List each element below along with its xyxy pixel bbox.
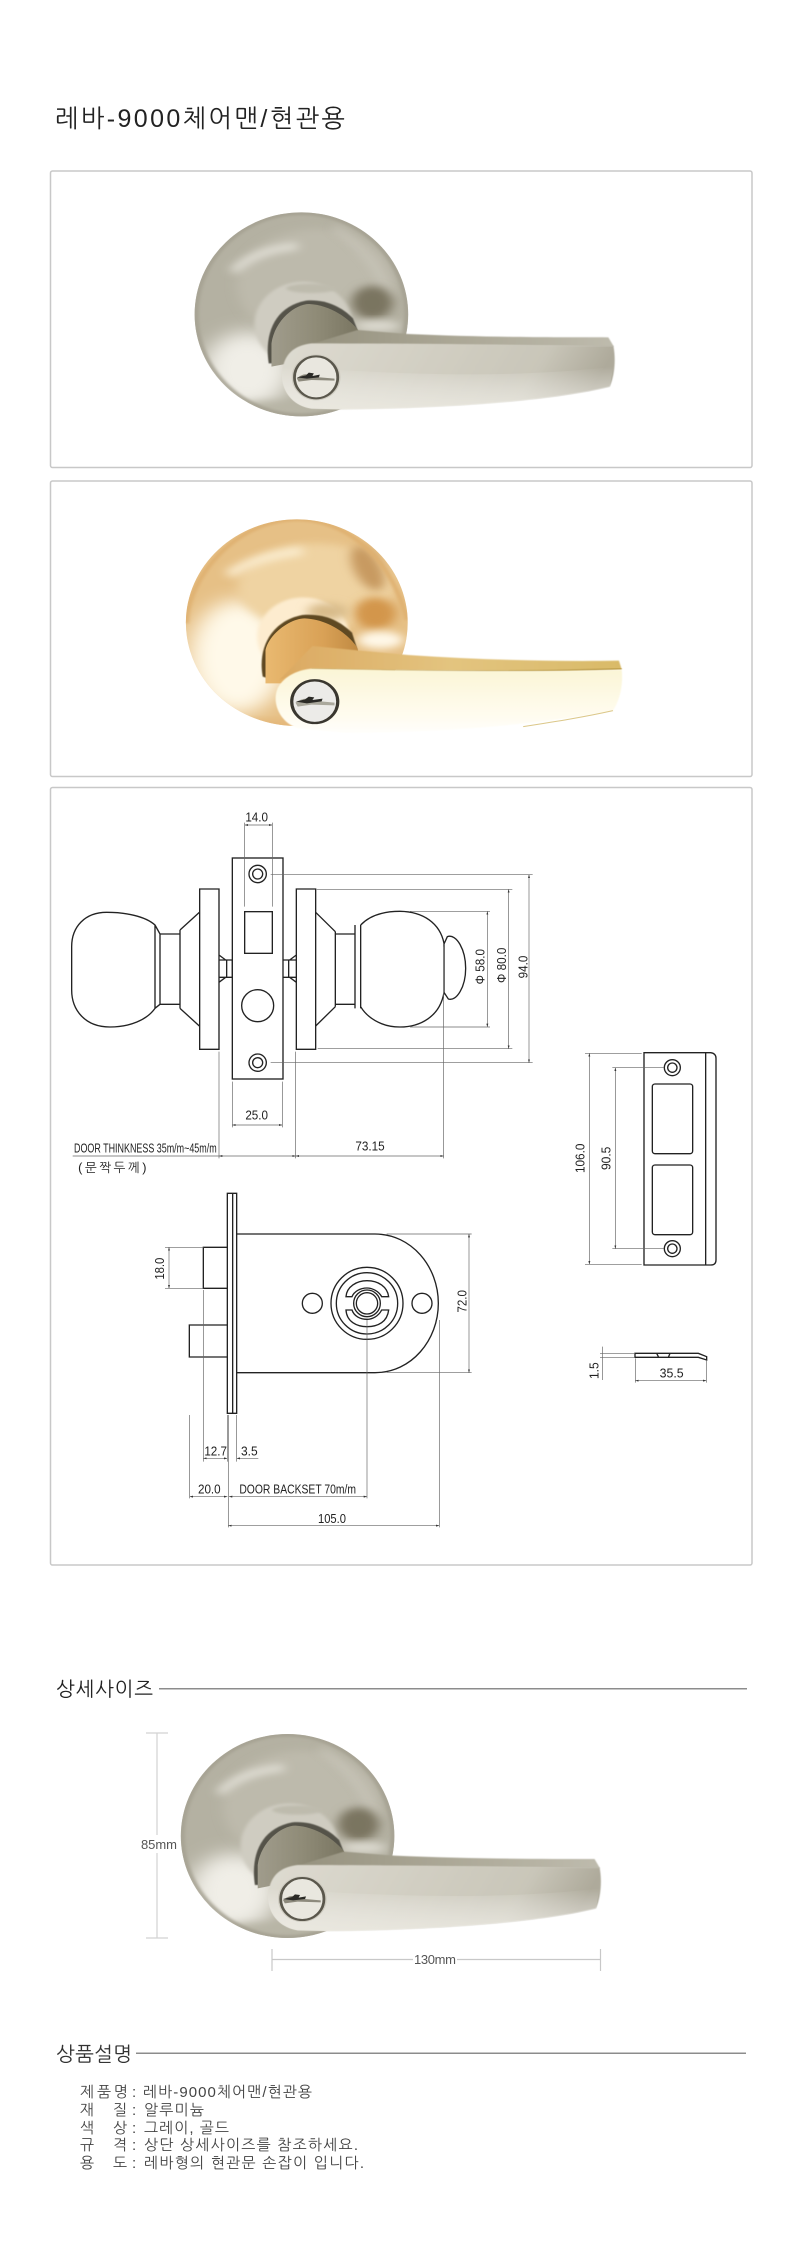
dimension labels (74, 811, 530, 1175)
drawing: mortise side view: 72.0 (455, 1290, 469, 1313)
drawing: mortise side view: 20.0 (198, 1482, 221, 1496)
drawing: mortise side view: 3.5 (241, 1444, 258, 1458)
dimension labels: 94.0 (516, 956, 530, 978)
dimension labels: DOOR THINKNESS 35m/m~45m/m (74, 1141, 217, 1155)
product spec list: 재 (80, 2102, 94, 2119)
product spec list: 격 (113, 2137, 127, 2154)
dimension labels: 14.0 (245, 811, 268, 825)
heading: detail size: 상세사이즈 (56, 1679, 153, 1701)
product spec list: 그레이, 골드 (144, 2120, 229, 2137)
product spec list: 알루미늄 (144, 2102, 204, 2119)
dimension: height 85mm (141, 1733, 177, 1938)
product spec list: : (132, 2084, 136, 2101)
product spec list: : (132, 2102, 136, 2119)
drawing: mortise side view: DOOR BACKSET 70m/m (239, 1482, 356, 1496)
knob left (72, 912, 199, 1027)
title: 레바-9000체어맨/현관용 (55, 105, 345, 133)
drawing: front view of knob set (72, 811, 533, 1175)
product spec list: 상단 상세사이즈를 참조하세요. (144, 2137, 358, 2154)
product spec list: 도 (113, 2155, 127, 2172)
product spec list: 상 (113, 2120, 128, 2137)
dimension labels: 73.15 (355, 1140, 385, 1154)
product spec list: 레바-9000체어맨/현관용 (143, 2084, 312, 2101)
drawing: strike plate (574, 1053, 716, 1265)
dimension labels: (문짝두께) (78, 1161, 146, 1175)
dimension labels: 25.0 (245, 1108, 268, 1122)
photo: gold lever handle (186, 519, 622, 733)
drawing: strike plate: 106.0 (574, 1144, 588, 1173)
drawing: mortise side view: 12.7 (204, 1444, 227, 1458)
dimension: width 130mm: 130mm (414, 1952, 456, 1967)
product spec list: 레바형의 현관문 손잡이 입니다. (144, 2155, 364, 2172)
plates and stubs (200, 889, 316, 1049)
dimension labels: Φ 58.0 (474, 949, 488, 984)
product spec list: : (132, 2155, 136, 2172)
drawing: strike plate edge view (587, 1347, 707, 1383)
product spec list: 용 (80, 2155, 94, 2172)
product spec list: 질 (113, 2102, 127, 2119)
dimension: height 85mm: 85mm (141, 1837, 177, 1852)
drawing: mortise side view: 105.0 (318, 1512, 346, 1526)
drawing: mortise side view (153, 1193, 472, 1527)
drawing: strike plate edge view: 35.5 (660, 1366, 684, 1380)
product spec list (80, 2084, 364, 2172)
heading: product description: 상품설명 (56, 2044, 132, 2066)
photo: silver lever with dimensions (181, 1734, 601, 1938)
product spec list: 색 (80, 2120, 94, 2137)
product spec list: 규 (80, 2137, 94, 2154)
panel: technical drawings (50, 788, 752, 1565)
drawing: strike plate: 90.5 (599, 1147, 613, 1170)
product spec list: : (132, 2120, 136, 2137)
drawing: strike plate edge view: 1.5 (587, 1362, 601, 1379)
faceplate (232, 858, 283, 1079)
knob right (316, 911, 466, 1027)
product spec list: : (132, 2137, 136, 2154)
dimension lines (73, 823, 533, 1158)
product spec list: 제품명 (80, 2084, 128, 2101)
panel: gold lever photo (50, 481, 752, 776)
photo: silver lever handle (195, 212, 615, 416)
dimension labels: Φ 80.0 (495, 948, 509, 983)
drawing: mortise side view: 18.0 (153, 1258, 167, 1280)
panel: silver lever photo (50, 171, 752, 468)
dimension: width 130mm (272, 1949, 600, 1971)
